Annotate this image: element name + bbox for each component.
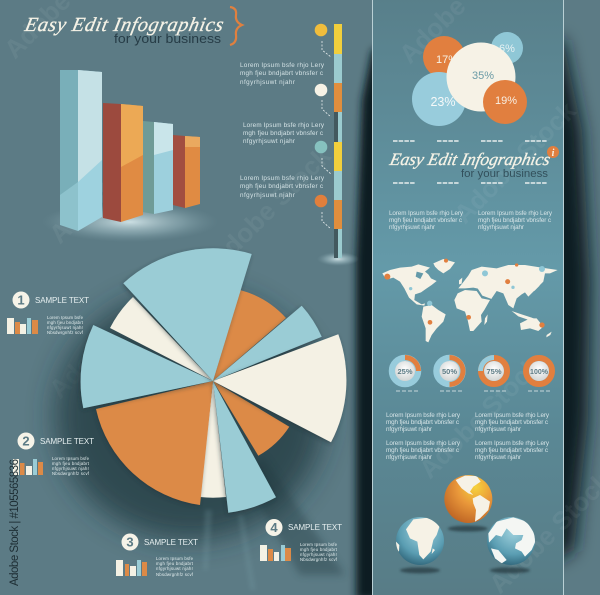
sample 1: mgh fjeu bndjabrt	[47, 320, 84, 325]
globes	[396, 475, 535, 573]
wedge: big blue top	[123, 248, 252, 381]
timeline text: mgh fjeu bndjabrt vbnsfer c	[243, 130, 323, 137]
title: left: Easy Edit Infographics	[22, 14, 226, 36]
timeline text: Lorem Ipsum bsfe rhjo Lery	[240, 175, 325, 182]
wedge: blue left	[81, 325, 213, 408]
sample 3: SAMPLE TEXT	[144, 538, 198, 547]
donut 100%	[526, 358, 552, 391]
text columns upper: mgh fjeu bndjabrt vbnsfer c	[389, 217, 462, 224]
timeline text: mgh fjeu bndjabrt vbnsfer c	[240, 183, 323, 190]
text columns upper: nfgyrhjsuwt njahr	[478, 224, 524, 231]
wedge: big cream right	[213, 334, 346, 442]
timeline text: Lorem Ipsum bsfe rhjo Lery	[243, 122, 325, 129]
sample 4: nfgyrhjsuwt njahr	[300, 552, 338, 557]
sample 1: SAMPLE TEXT	[35, 296, 89, 305]
3D bar chart	[42, 70, 218, 242]
donut 100%: 100%	[530, 369, 549, 376]
sample 1: nfgyrhjsuwt njahr	[47, 325, 84, 330]
bubble chart: 23%	[430, 95, 456, 109]
text columns upper: Lorem Ipsum bsfe rhjo Lery	[478, 210, 553, 217]
sample 2: Lorem Ipsum bsfe	[52, 456, 90, 461]
bubble chart: 6%	[499, 43, 515, 55]
timeline text: nfgyrhjsuwt njahr	[240, 79, 295, 86]
globe: Africa	[396, 517, 444, 573]
icon: info badge	[547, 146, 559, 159]
text columns lower: mgh fjeu bndjabrt vbnsfer c	[386, 447, 459, 454]
globe: orange	[444, 475, 492, 532]
pie chart	[81, 248, 346, 513]
text columns upper: Lorem Ipsum bsfe rhjo Lery	[389, 210, 464, 217]
sample 1: Lorem Ipsum bsfe	[47, 315, 84, 320]
watermarks: Adobe Stock	[43, 115, 177, 249]
sample 4	[260, 519, 342, 562]
sample 3: mgh fjeu bndjabrt	[156, 561, 194, 566]
text columns lower: Lorem Ipsum bsfe rhjo Lery	[475, 440, 550, 447]
title: right: for your business	[461, 168, 549, 180]
donut 75%: 75%	[486, 367, 502, 376]
wedge: orange lower right	[213, 381, 289, 456]
donut 25%: 25%	[397, 367, 413, 376]
sample 3: Lorem Ipsum bsfe	[156, 556, 194, 561]
sample 4: mgh fjeu bndjabrt	[300, 547, 338, 552]
watermarks: Adobe Stock	[203, 140, 337, 274]
text columns upper: mgh fjeu bndjabrt vbnsfer c	[478, 217, 551, 224]
timeline bar	[317, 24, 359, 266]
sample 4: 4	[270, 520, 278, 535]
sample 2: SAMPLE TEXT	[40, 437, 94, 446]
wedge: big orange	[96, 381, 213, 505]
text columns lower: nfgyrhjsuwt njahr	[386, 426, 432, 433]
donut 75%	[478, 355, 507, 391]
wedge: small blue	[213, 306, 322, 381]
timeline nodes	[315, 24, 331, 229]
text columns lower: nfgyrhjsuwt njahr	[386, 454, 432, 461]
sample 1: 1	[17, 292, 25, 308]
world map	[382, 259, 558, 342]
sample 3	[116, 534, 198, 577]
sample 3: nfgyrhjsuwt njahr	[156, 566, 194, 571]
text columns lower: mgh fjeu bndjabrt vbnsfer c	[386, 419, 459, 426]
sample 2: mgh fjeu bndjabrt	[52, 461, 90, 466]
wedge: orange top	[213, 290, 286, 381]
sample 2: Nbsdwrgnhfz scvf	[52, 471, 90, 476]
pie shadow	[55, 290, 345, 590]
sample 4: SAMPLE TEXT	[288, 523, 342, 532]
text columns lower: nfgyrhjsuwt njahr	[475, 454, 521, 461]
sample 3: 3	[126, 534, 134, 550]
sample 1: Nbsdwrgnhfz scvf	[47, 330, 84, 335]
text columns lower: mgh fjeu bndjabrt vbnsfer c	[475, 419, 548, 426]
watermarks: Adobe Stock	[43, 270, 177, 404]
donut 50%: 50%	[442, 367, 457, 376]
text columns lower: Lorem Ipsum bsfe rhjo Lery	[386, 412, 461, 419]
watermarks: Adobe Stock	[413, 350, 547, 484]
timeline text: Lorem Ipsum bsfe rhjo Lery	[240, 62, 325, 69]
icon: orange brace	[230, 7, 242, 45]
title: right: Easy Edit Infographics	[387, 149, 552, 169]
title: left	[22, 14, 226, 46]
bubble chart	[412, 32, 527, 126]
text columns lower: Lorem Ipsum bsfe rhjo Lery	[475, 412, 550, 419]
text columns upper	[389, 210, 553, 231]
panel shadows	[356, 40, 590, 595]
sample 4: Lorem Ipsum bsfe	[300, 542, 338, 547]
donut 50%	[436, 355, 466, 391]
text columns upper: nfgyrhjsuwt njahr	[389, 224, 435, 231]
title: left: for your business	[114, 31, 222, 46]
bubble chart: 35%	[472, 70, 494, 82]
icon: info badge: i	[552, 148, 555, 159]
timeline text: nfgyrhjsuwt njahr	[243, 138, 295, 145]
wedge: cream upper left	[110, 297, 213, 381]
text columns lower: nfgyrhjsuwt njahr	[475, 426, 521, 433]
panel: right column	[372, 0, 564, 595]
watermarks: Adobe Stock	[448, 95, 582, 229]
title: right	[387, 141, 552, 183]
stock caption: Adobe Stock | #105565836	[9, 459, 21, 586]
donut 25%	[392, 355, 421, 391]
globe: Eurasia	[487, 517, 535, 573]
sample 2: 2	[22, 434, 30, 448]
bubble chart: 17%	[436, 54, 458, 66]
wedge: blue bottom	[213, 381, 276, 513]
bubble chart: 19%	[495, 95, 517, 107]
timeline text: nfgyrhjsuwt njahr	[240, 192, 295, 199]
text columns lower: mgh fjeu bndjabrt vbnsfer c	[475, 447, 548, 454]
wedge: cream bottom	[200, 381, 226, 498]
text columns lower: Lorem Ipsum bsfe rhjo Lery	[386, 440, 461, 447]
text columns lower	[386, 412, 550, 461]
sample 2	[13, 432, 94, 476]
timeline text	[240, 62, 325, 199]
sample 1	[7, 292, 89, 335]
timeline text: mgh fjeu bndjabrt vbnsfer c	[240, 70, 323, 77]
sample 2: nfgyrhjsuwt njahr	[52, 466, 90, 471]
sample 4: Nbsdwrgnhfz scvf	[300, 557, 338, 562]
sample 3: Nbsdwrgnhfz scvf	[156, 572, 194, 577]
